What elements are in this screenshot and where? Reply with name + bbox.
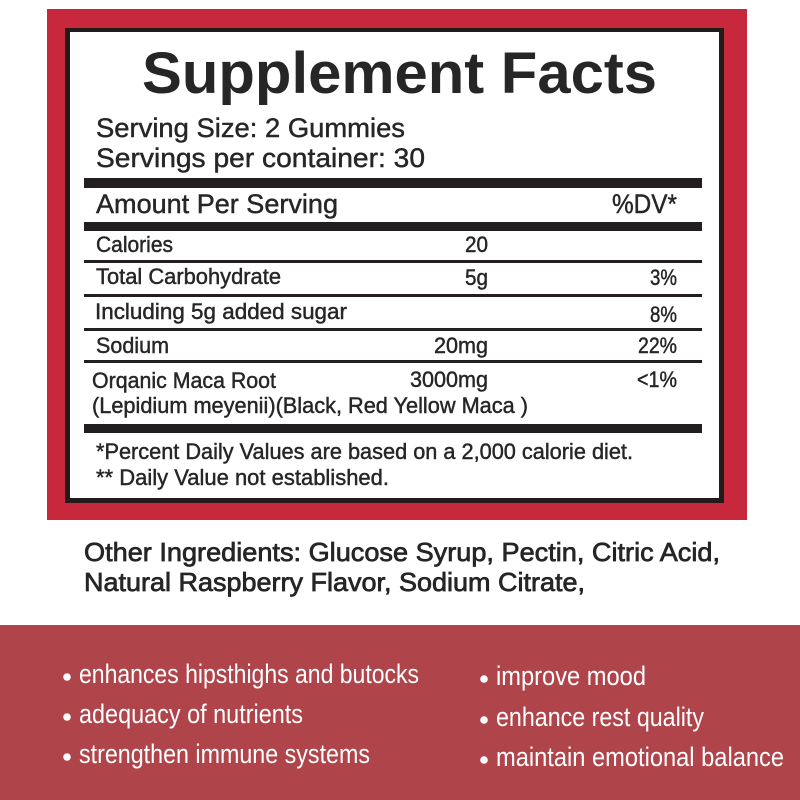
benefits list: left column: strengthen immune systems: [79, 739, 370, 769]
row: added sugar: Including 5g added sugar: [95, 299, 347, 324]
footnotes: ** Daily Value not established.: [96, 465, 389, 490]
white label area: [70, 32, 719, 498]
row: organic maca root: Orqanic Maca Root: [92, 368, 276, 393]
row: sodium: [96, 333, 677, 358]
benefits list: right column: enhance rest quality: [496, 702, 704, 732]
footnotes: [96, 439, 633, 490]
row: sodium: 20mg: [434, 333, 488, 358]
table header: %DV*: [612, 189, 677, 219]
row: organic maca root: (Lepidium meyenii)(Black, Red Yellow Maca ): [92, 393, 528, 418]
serving information: Servings per container: 30: [96, 143, 425, 173]
footnotes: *Percent Daily Values are based on a 2,000 calorie diet.: [96, 439, 633, 464]
table header: [96, 189, 677, 219]
row: calories: [96, 232, 488, 257]
other ingredients text: Other Ingredients: Glucose Syrup, Pectin, Citric Acid,: [84, 537, 720, 567]
row: calories: Calories: [96, 232, 173, 257]
row: total carbohydrate: 5g: [465, 265, 488, 290]
serving information: [96, 113, 425, 173]
serving information: Serving Size: 2 Gummies: [96, 113, 405, 143]
other ingredients text: Natural Raspberry Flavor, Sodium Citrate,: [84, 567, 585, 597]
row: total carbohydrate: 3%: [650, 265, 677, 290]
benefits list: right column: improve mood: [496, 661, 646, 691]
row: calories: 20: [465, 232, 488, 257]
table header: Amount Per Serving: [96, 189, 338, 219]
benefits list: left column: enhances hipsthighs and butocks: [79, 659, 419, 689]
other ingredients text: [84, 537, 720, 597]
benefits list: left column: adequacy of nutrients: [79, 699, 303, 729]
title: Supplement Facts: [142, 41, 657, 106]
panel: supplement facts label: [47, 9, 747, 520]
table: nutrition rows: [84, 178, 702, 433]
row: added sugar: 8%: [650, 302, 677, 327]
benefits list: right column: [480, 661, 784, 772]
benefits list: left column: [63, 659, 419, 769]
row: added sugar: [95, 299, 677, 327]
panel: benefits: [0, 625, 800, 800]
row: total carbohydrate: Total Carbohydrate: [96, 264, 281, 289]
row: sodium: 22%: [638, 333, 677, 358]
red frame: [47, 9, 747, 520]
row: organic maca root: <1%: [637, 367, 677, 392]
row: organic maca root: 3000mg: [410, 367, 488, 392]
black inner border: [65, 28, 724, 503]
row: sodium: Sodium: [96, 333, 169, 358]
row: total carbohydrate: [96, 264, 677, 290]
row: organic maca root: [92, 367, 677, 418]
